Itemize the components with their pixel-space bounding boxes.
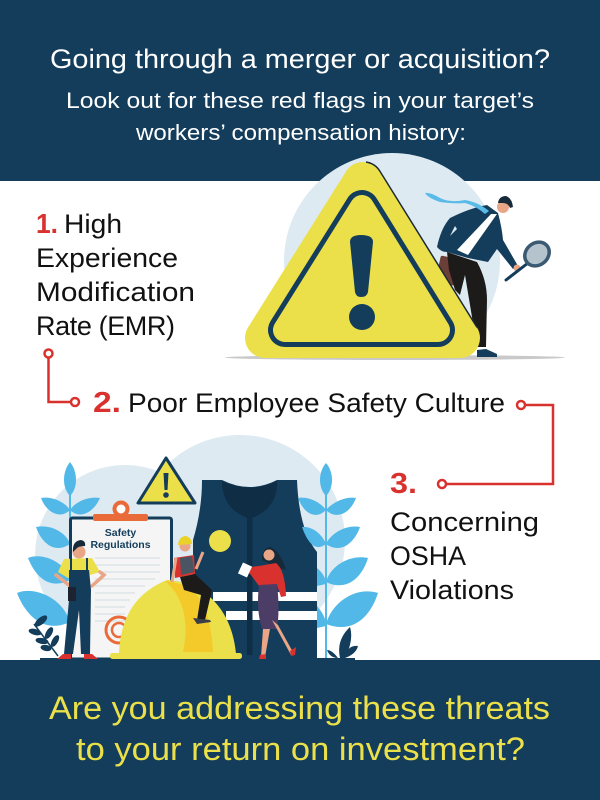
icon: worker man in overalls xyxy=(56,540,104,659)
list item 1: High Experience Modification Rate: 1. xyxy=(36,208,58,239)
panel: header band xyxy=(0,0,600,181)
panel: footer band xyxy=(0,660,600,800)
arrow: connector from item 1 to item 2 xyxy=(44,350,79,406)
icon: vest xyxy=(193,480,317,658)
heading xyxy=(50,44,550,145)
heading: workers’ compensation history: xyxy=(135,120,466,145)
icon: small warning triangle xyxy=(138,458,195,503)
icon: clipboard with safety regulations: Safety xyxy=(105,527,136,539)
list item 3: Concerning OSHA Violations: OSHA xyxy=(390,541,466,571)
icon: woman with paper xyxy=(238,547,296,659)
list item 2: Poor Employee Safety Culture: Poor Employee Safety Culture xyxy=(128,388,505,418)
list item 1: High Experience Modification Rate: Modification xyxy=(36,277,195,307)
list item 1: High Experience Modification Rate xyxy=(36,208,195,341)
icon: clipboard with safety regulations xyxy=(70,502,172,659)
heading: Going through a merger or acquisition? xyxy=(50,44,550,74)
icon: large warning triangle xyxy=(265,162,477,338)
heading: Look out for these red flags in your target’s xyxy=(66,88,534,113)
list item 3: Concerning OSHA Violations xyxy=(390,468,539,605)
icon: right small dark plant xyxy=(327,627,358,658)
icon: businessman with magnifier xyxy=(425,193,554,357)
icon: left plant xyxy=(17,462,100,626)
list item 1: High Experience Modification Rate: Rate (EMR) xyxy=(36,311,175,341)
icon: right plant xyxy=(298,463,378,658)
list item 1: High Experience Modification Rate: High xyxy=(64,209,122,239)
icon: hard hat xyxy=(110,580,242,659)
list item 3: Concerning OSHA Violations: Concerning xyxy=(390,507,539,537)
icon: clipboard with safety regulations: Regulations xyxy=(90,539,151,551)
illustration: workplace safety scene xyxy=(17,435,378,661)
icon: seated woman worker xyxy=(172,536,212,624)
arrow: connector from item 2 to item 3 xyxy=(438,401,553,488)
icon: left small dark plant xyxy=(29,614,60,656)
list item 3: Concerning OSHA Violations: Violations xyxy=(390,575,514,605)
call to action xyxy=(49,690,550,767)
call to action: to your return on investment? xyxy=(76,731,525,767)
list item 1: High Experience Modification Rate: Experience xyxy=(36,243,178,273)
illustration: warning sign and inspector xyxy=(225,153,565,370)
list item 3: Concerning OSHA Violations: 3. xyxy=(390,468,417,500)
call to action: Are you addressing these threats xyxy=(49,690,550,726)
list item 2: Poor Employee Safety Culture: 2. xyxy=(93,387,121,419)
